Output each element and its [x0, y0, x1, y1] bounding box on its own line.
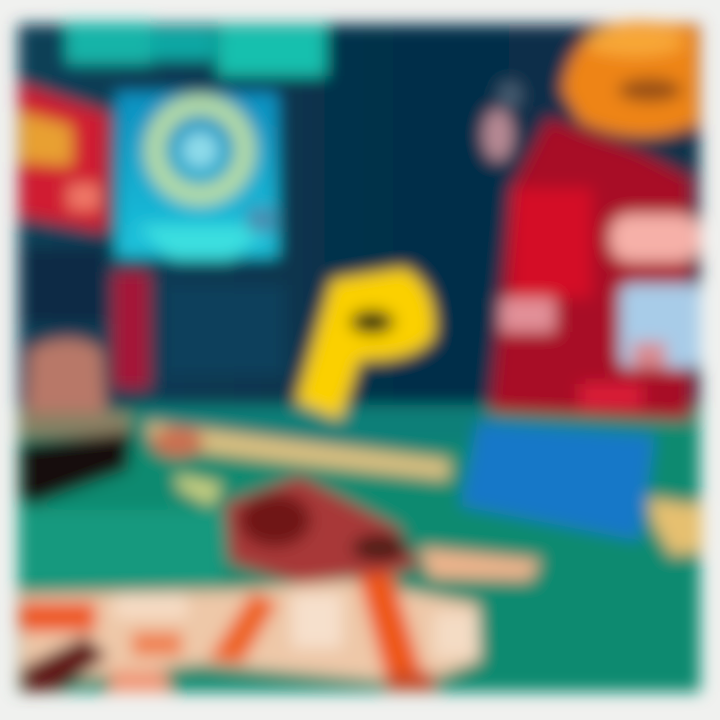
shape: pink label — [610, 214, 700, 262]
panel: dark backdrop — [18, 24, 700, 416]
stripe: diagonal tan band — [145, 422, 450, 506]
pattern: orange and white checks — [20, 572, 480, 692]
figure: left person — [20, 339, 132, 505]
panel: cyan square with ring — [116, 92, 278, 260]
cluster: red and dark shapes — [225, 476, 540, 584]
panel: red block — [490, 118, 690, 420]
shape: light blue panel — [620, 284, 700, 368]
letter shape: yellow P — [296, 268, 434, 420]
column: dark red bar — [24, 248, 285, 388]
flag: red and yellow panel — [20, 84, 108, 232]
banner: teal top band — [66, 22, 326, 76]
panel: blue rectangle — [460, 422, 655, 541]
shape: faint pink mark — [483, 81, 522, 161]
stripe: right tan bar — [648, 498, 702, 556]
icon: orange burger — [562, 22, 698, 137]
panel: green floor — [18, 405, 700, 692]
